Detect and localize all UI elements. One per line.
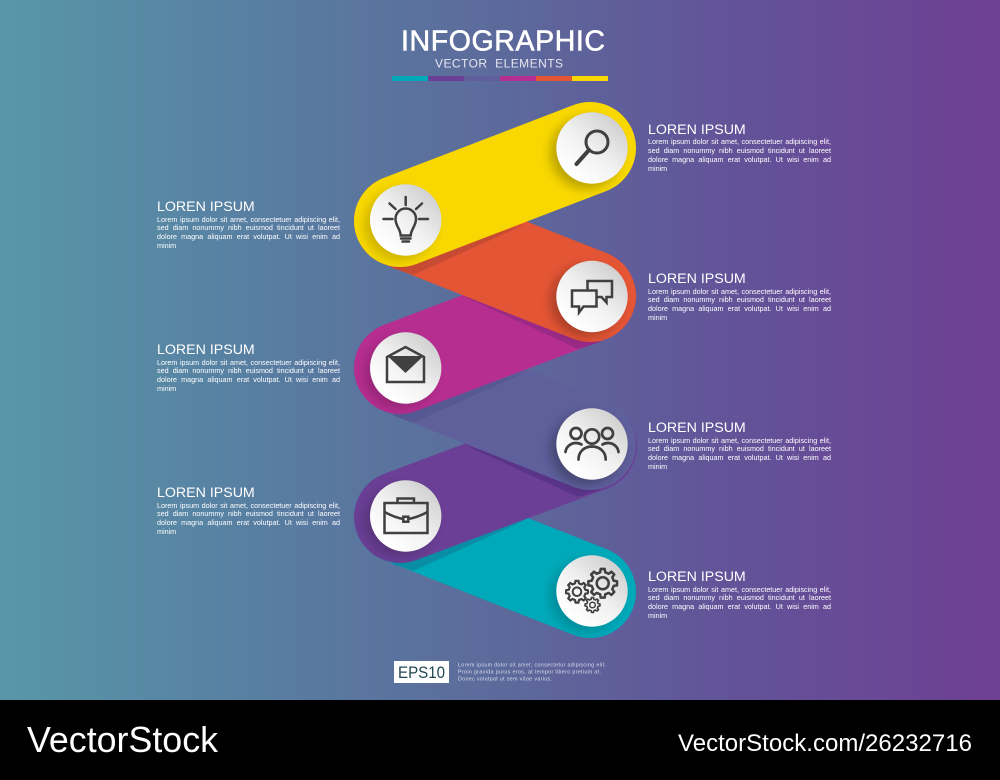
text: right 3: Lorem ipsum dolor sit amet, consectetuer adipiscing elit, — [648, 436, 831, 444]
text: right 1: Lorem ipsum dolor sit amet, consectetuer adipiscing elit, — [648, 137, 831, 146]
text: right 1: sed diam nonummy nibh euismod tincidunt ut laoreet — [648, 146, 831, 155]
icon: team of three — [566, 428, 618, 460]
text: right 1: LOREN IPSUM — [648, 122, 746, 138]
text: left 3 — [157, 485, 340, 536]
text: right 1: minim — [648, 164, 667, 173]
node: people — [550, 408, 628, 485]
icon: magnifying glass — [576, 131, 608, 164]
text: left 3: sed diam nonummy nibh euismod tincidunt ut laoreet — [157, 509, 340, 518]
text: left 1: LOREN IPSUM — [157, 199, 255, 215]
text: right 3 — [648, 420, 831, 471]
icon: gears — [566, 569, 617, 612]
text: left 1: minim — [157, 241, 176, 250]
icon: briefcase — [384, 498, 428, 533]
text: right 2 — [648, 271, 831, 322]
text: right 3: LOREN IPSUM — [648, 420, 746, 436]
text: left 2: dolore magna aliquam erat volutpat. Ut wisi enim ad — [157, 375, 340, 384]
text: right 2: dolore magna aliquam erat volutpat. Ut wisi enim ad — [648, 304, 831, 313]
text: right 3: sed diam nonummy nibh euismod tincidunt ut laoreet — [648, 444, 831, 453]
band: purple — [400, 444, 600, 517]
footnote text — [458, 662, 606, 682]
text: right 2: minim — [648, 313, 667, 322]
text: right 2: LOREN IPSUM — [648, 271, 746, 287]
band: slate — [392, 368, 590, 444]
text: right 3: dolore magna aliquam erat volutpat. Ut wisi enim ad — [648, 453, 831, 462]
subtitle: vector elements: VECTOR ELEMENTS — [435, 56, 563, 70]
text: left 2: Lorem ipsum dolor sit amet, consectetuer adipiscing elit, — [157, 358, 340, 366]
text: right 4: Lorem ipsum dolor sit amet, consectetuer adipiscing elit, — [648, 584, 831, 594]
icon: envelope — [387, 347, 424, 382]
text: right 4: sed diam nonummy nibh euismod tincidunt ut laoreet — [648, 593, 831, 602]
text: right 4: LOREN IPSUM — [648, 569, 746, 585]
image url: VectorStock.com/26232716 — [678, 730, 972, 757]
colour bar under title — [392, 76, 608, 81]
text: left 3: LOREN IPSUM — [157, 485, 255, 501]
icon: speech bubbles — [572, 281, 612, 312]
icon: light bulb — [384, 197, 428, 242]
footnote text: Proin gravida purus eros, at tempor libero pretium at. — [458, 670, 601, 676]
title: INFOGRAPHIC: INFOGRAPHIC — [401, 26, 605, 58]
node: envelope — [364, 332, 441, 409]
footnote text: Donec volutpat ut sem vitae varius. — [458, 676, 552, 682]
text: right 1: dolore magna aliquam erat volutpat. Ut wisi enim ad — [648, 155, 831, 164]
band: magenta — [400, 296, 600, 368]
text: left 3: Lorem ipsum dolor sit amet, consectetuer adipiscing elit, — [157, 500, 340, 510]
text: left 2: minim — [157, 384, 176, 393]
text: left 2: LOREN IPSUM — [157, 342, 255, 358]
text: right 1 — [648, 122, 831, 173]
text: right 4 — [648, 569, 831, 620]
node: magnifier — [550, 112, 628, 189]
band: yellow — [400, 148, 590, 221]
text: left 2 — [157, 342, 340, 393]
text: right 2: Lorem ipsum dolor sit amet, consectetuer adipiscing elit, — [648, 286, 831, 296]
node: briefcase — [364, 480, 441, 557]
node: gears — [550, 555, 628, 632]
text: left 3: dolore magna aliquam erat volutpat. Ut wisi enim ad — [157, 518, 340, 527]
text: left 1: sed diam nonummy nibh euismod tincidunt ut laoreet — [157, 223, 340, 232]
node: light bulb — [364, 184, 441, 261]
text: right 4: dolore magna aliquam erat volutpat. Ut wisi enim ad — [648, 602, 831, 611]
band: teal — [392, 517, 590, 592]
badge: EPS10: EPS10 — [398, 663, 445, 682]
text: left 3: minim — [157, 527, 176, 536]
text: right 3: minim — [648, 462, 667, 471]
text: right 2: sed diam nonummy nibh euismod tincidunt ut laoreet — [648, 295, 831, 304]
text: left 1: dolore magna aliquam erat volutpat. Ut wisi enim ad — [157, 232, 340, 241]
node: chat — [550, 261, 628, 337]
text: right 4: minim — [648, 611, 667, 620]
text: left 1: Lorem ipsum dolor sit amet, consectetuer adipiscing elit, — [157, 214, 340, 224]
text: left 1 — [157, 199, 340, 250]
brand logo: VectorStock: VectorStock — [27, 719, 219, 760]
band: orange — [392, 221, 590, 296]
footnote text: Lorem ipsum dolor sit amet, consectetur adipiscing elit. — [458, 662, 606, 668]
text: left 2: sed diam nonummy nibh euismod tincidunt ut laoreet — [157, 366, 340, 375]
